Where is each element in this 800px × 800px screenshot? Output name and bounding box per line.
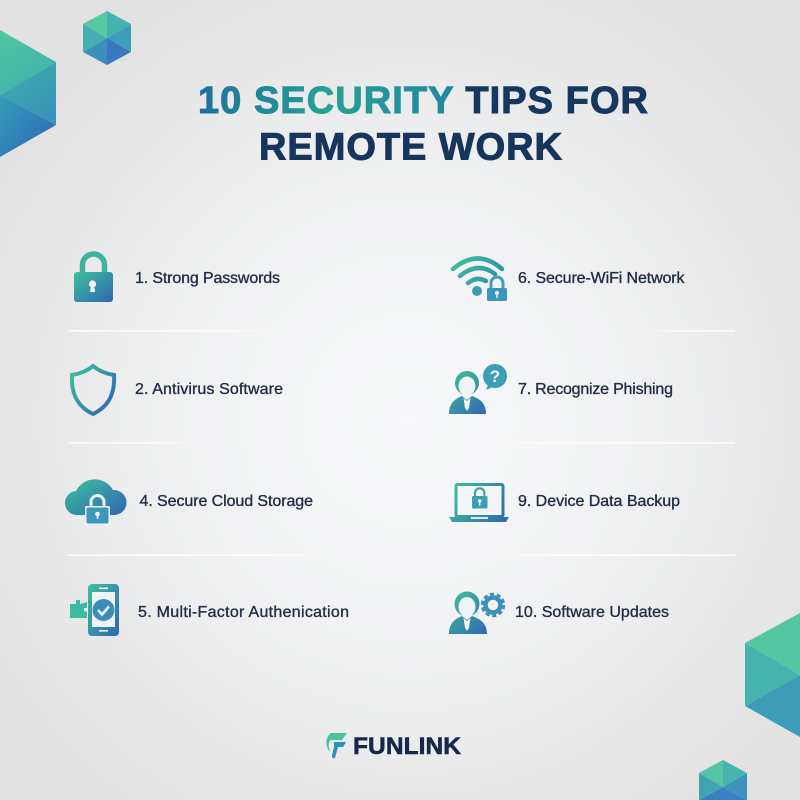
icon: person with question bubble: ? <box>490 367 500 386</box>
icon: person with gear <box>449 592 504 634</box>
tip 2: antivirus software <box>72 366 283 414</box>
wordmark: FUNLINK <box>353 733 461 760</box>
label: 5. Multi-Factor Authenication <box>138 604 349 621</box>
tip 6: secure wifi <box>453 258 686 301</box>
icon: key piece <box>70 600 87 618</box>
label: 9. Device Data Backup <box>518 493 680 510</box>
tip 7: recognize phishing <box>449 364 673 414</box>
icon: laptop with padlock <box>449 484 509 522</box>
icon: logo mark <box>326 733 347 758</box>
logo: funlink <box>326 733 461 760</box>
tip 10: software updates <box>449 592 669 634</box>
icon: shield <box>72 366 114 414</box>
label: 2. Antivirus Software <box>135 381 283 398</box>
tip 1: strong passwords <box>74 254 280 302</box>
tip 4: secure cloud storage <box>65 479 313 525</box>
title: REMOTE WORK <box>259 126 563 168</box>
label: 7. Recognize Phishing <box>518 381 673 398</box>
icon: wifi with padlock <box>453 258 507 301</box>
label: 6. Secure-WiFi Network <box>518 270 686 287</box>
hexagon: top left large <box>0 30 56 157</box>
tip 5: multi-factor authentication <box>70 584 349 636</box>
tip 9: device data backup <box>449 484 680 522</box>
label: 4. Secure Cloud Storage <box>140 493 313 510</box>
title: 10 SECURITY TIPS FOR <box>198 80 648 122</box>
icon: padlock <box>74 254 113 302</box>
label: 1. Strong Passwords <box>135 270 280 287</box>
title <box>198 80 648 168</box>
label: 10. Software Updates <box>515 604 669 621</box>
icon: phone with check <box>88 584 119 636</box>
hexagon: right large <box>745 613 800 737</box>
hexagon: bottom small <box>699 760 747 800</box>
hexagon: top small <box>83 11 131 65</box>
icon: cloud with padlock <box>65 479 127 525</box>
icon: person with question bubble <box>449 364 507 414</box>
